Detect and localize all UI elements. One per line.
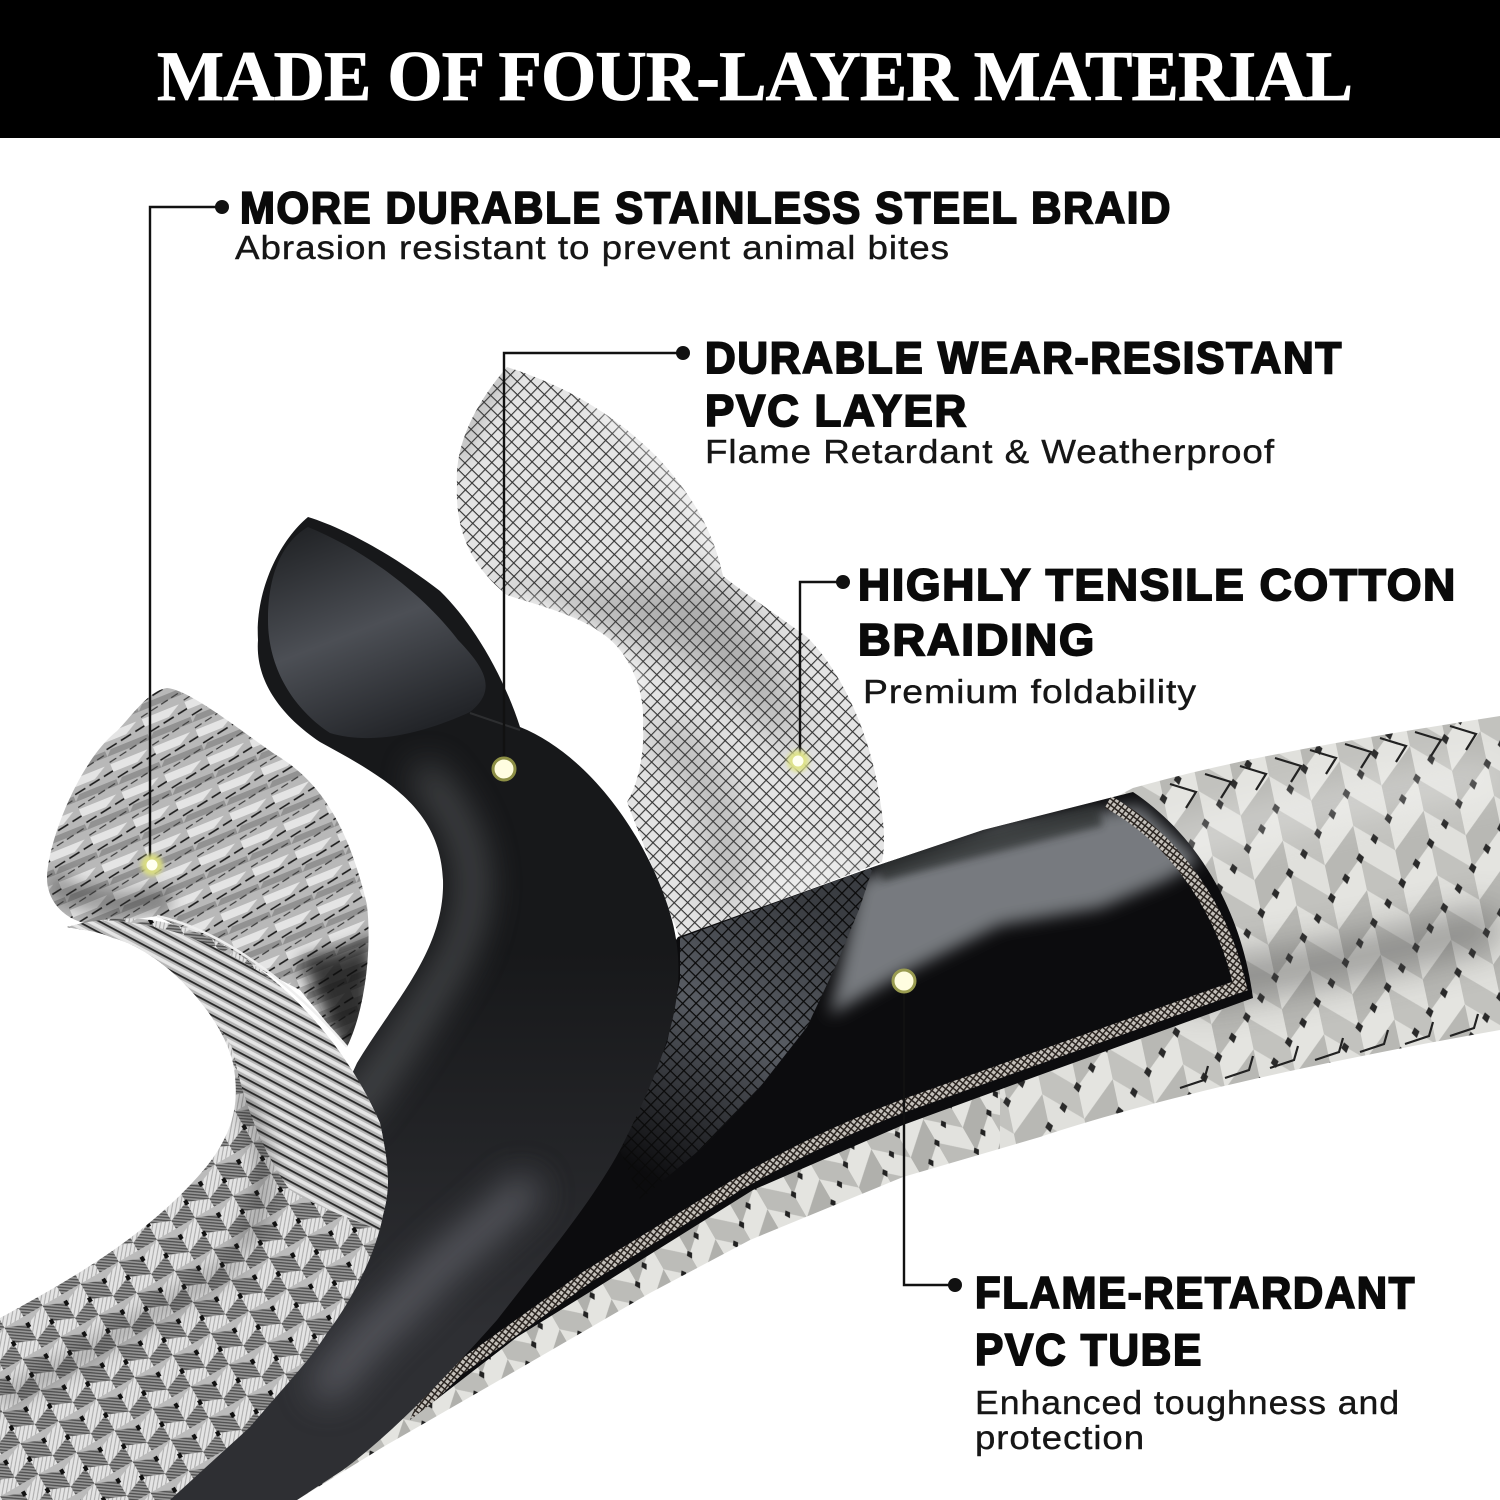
PVC layer black sleeve	[170, 517, 678, 1500]
header band	[0, 0, 1500, 138]
stainless steel braid, twisted front and hose	[0, 900, 400, 1500]
callout: flame-retardant PVC tube	[893, 970, 1416, 1456]
callout: stainless steel braid: Abrasion resistant to prevent animal bites	[235, 229, 950, 266]
stainless steel braid, upper flap	[47, 688, 369, 1047]
cut mesh band	[410, 802, 1240, 1417]
callout: flame-retardant PVC tube: FLAME-RETARDANT	[975, 1267, 1416, 1318]
silver outer hose	[280, 680, 1500, 1500]
callout: PVC layer: PVC LAYER	[705, 385, 968, 436]
top edge chevron lines	[1170, 726, 1478, 1088]
inner lobe	[268, 527, 486, 738]
callout: cotton braiding: BRAIDING	[858, 614, 1096, 665]
callout: PVC layer: DURABLE WEAR-RESISTANT	[705, 332, 1343, 383]
title: MADE OF FOUR-LAYER MATERIAL	[157, 38, 1353, 116]
callout: PVC layer: Flame Retardant & Weatherproof	[705, 433, 1275, 470]
callout: flame-retardant PVC tube: PVC TUBE	[975, 1324, 1203, 1375]
callout: cotton braiding: Premium foldability	[863, 673, 1197, 710]
body highlights	[345, 770, 473, 1120]
callout: cotton braiding: HIGHLY TENSILE COTTON	[858, 559, 1457, 610]
callout: cotton braiding	[787, 559, 1457, 772]
callout: stainless steel braid	[141, 182, 1172, 876]
braid fold highlight	[157, 916, 347, 1047]
flame-retardant PVC inner tube	[410, 792, 1253, 1420]
tube highlight	[830, 805, 1200, 1015]
callout: flame-retardant PVC tube: protection	[975, 1419, 1145, 1456]
callout: PVC layer	[493, 332, 1343, 780]
cotton braiding mesh layer	[456, 367, 884, 936]
mesh overlay on tube	[624, 867, 873, 1170]
callout: stainless steel braid: MORE DURABLE STAINLESS STEEL BRAID	[240, 182, 1172, 233]
callout: flame-retardant PVC tube: Enhanced toughness and	[975, 1384, 1400, 1421]
